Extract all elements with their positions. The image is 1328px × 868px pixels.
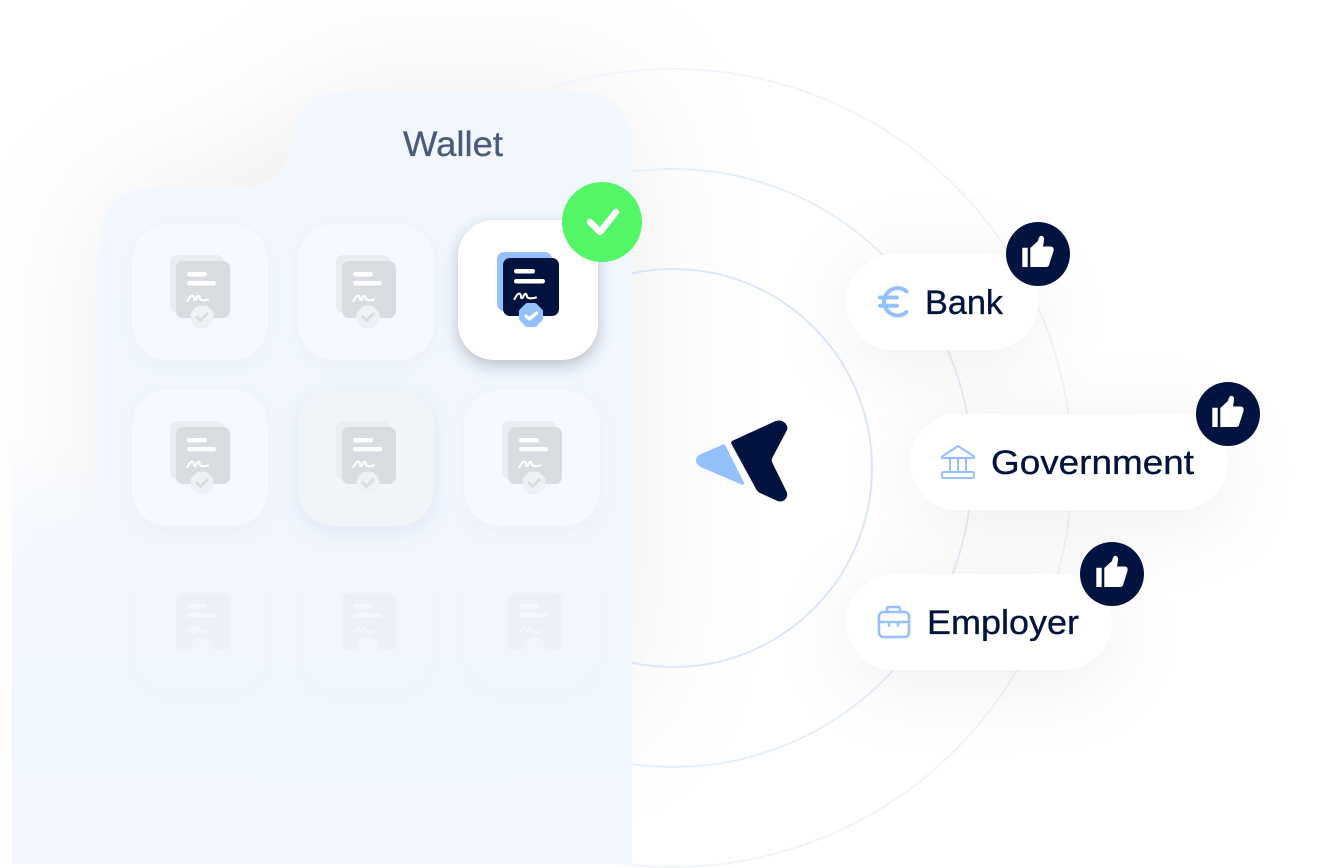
logo xyxy=(696,420,787,502)
label: employer: Employer xyxy=(927,604,1079,642)
panel shadow xyxy=(100,92,632,710)
icon: government building xyxy=(942,446,974,478)
card row 3 column 3 xyxy=(464,556,600,692)
card row 1 column 1 xyxy=(132,224,268,360)
icon: green check badge xyxy=(562,182,642,262)
card row 2 column 1 xyxy=(132,390,268,526)
concentric circles xyxy=(274,69,1072,867)
icon: briefcase xyxy=(879,607,909,637)
icon: thumbs up xyxy=(1006,222,1070,286)
pill: government xyxy=(910,382,1260,510)
card row 3 column 1 xyxy=(132,556,268,692)
card row 2 column 3 xyxy=(464,390,600,526)
icon: thumbs up xyxy=(1080,542,1144,606)
selected card xyxy=(458,220,598,360)
icon: euro xyxy=(880,288,906,316)
pill: bank xyxy=(846,222,1070,350)
card row 1 column 2 xyxy=(298,224,434,360)
card row 3 column 2 xyxy=(298,556,434,692)
pill: employer xyxy=(846,542,1144,670)
wallet heading: Wallet xyxy=(403,125,503,164)
panel: wallet xyxy=(100,92,632,864)
label: bank: Bank xyxy=(925,284,1004,322)
icon: thumbs up xyxy=(1196,382,1260,446)
label: government: Government xyxy=(991,444,1195,482)
card row 2 column 2 xyxy=(298,390,434,526)
left edge fade strip xyxy=(12,440,102,864)
